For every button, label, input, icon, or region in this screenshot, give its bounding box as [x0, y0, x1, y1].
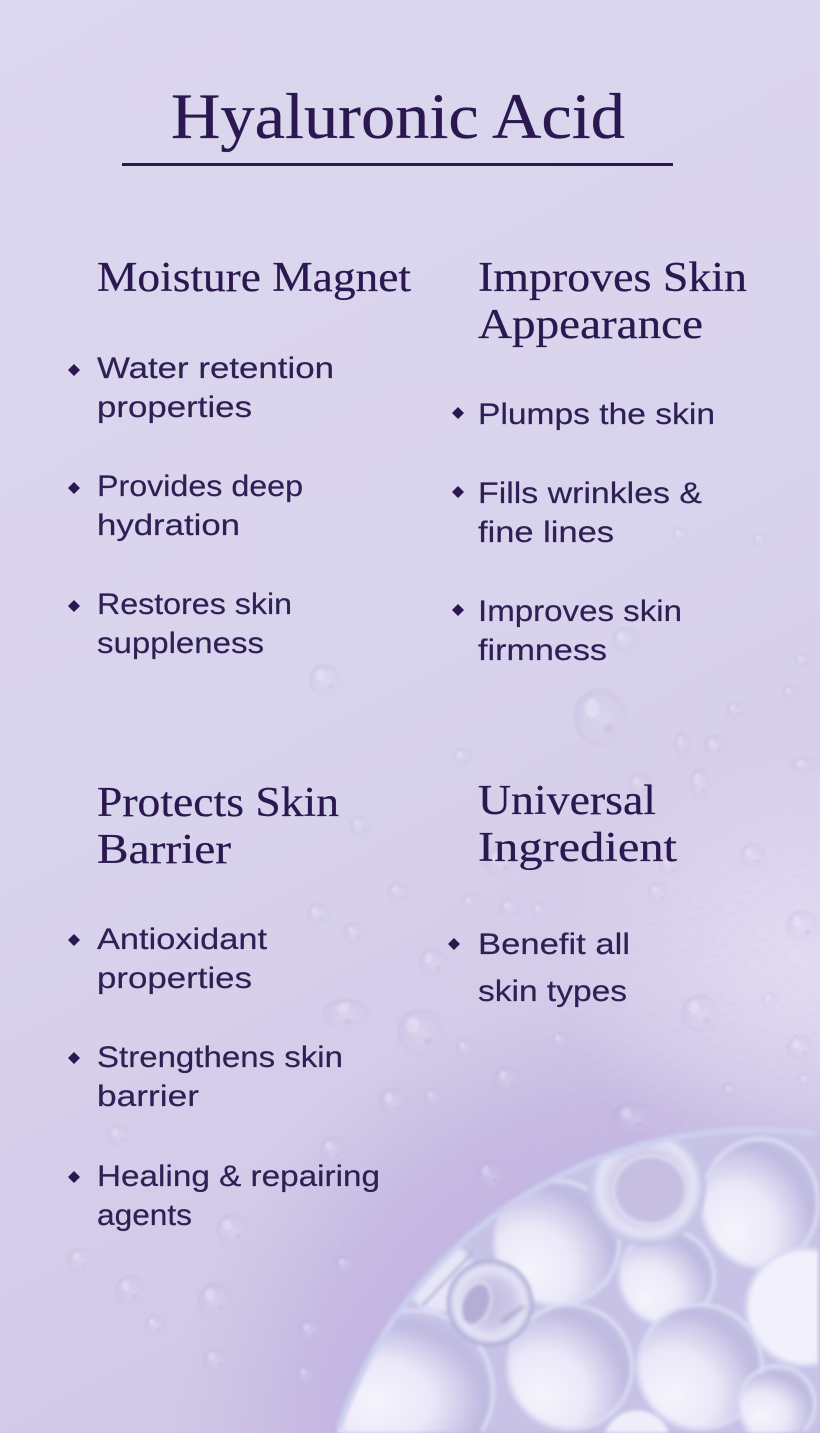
background: lavender water droplet photo [0, 526, 820, 1433]
panel: Improves Skin Appearance [452, 255, 747, 667]
bullet list: moisture benefits [68, 352, 334, 660]
bullet list: barrier benefits: Antioxidant [97, 923, 268, 956]
heading: Improves Skin Appearance: Appearance [478, 302, 703, 348]
heading: Protects Skin Barrier [97, 780, 339, 873]
bullet list: barrier benefits: Strengthens skin [97, 1041, 343, 1074]
bullet list: universal benefits: skin types [478, 975, 627, 1008]
bullet list: moisture benefits: Provides deep [97, 470, 303, 503]
bullet list: appearance benefits: firmness [478, 634, 607, 667]
bullet list: appearance benefits: fine lines [478, 516, 614, 549]
bullet list: moisture benefits: Water retention [97, 352, 334, 385]
heading: Protects Skin Barrier: Barrier [97, 827, 231, 873]
panel: Protects Skin Barrier [68, 780, 380, 1232]
heading: Universal Ingredient: Universal [478, 778, 656, 824]
panel: Moisture Magnet [68, 255, 411, 660]
title: Hyaluronic Acid [171, 81, 625, 153]
bullet list: universal benefits: Benefit all [478, 928, 630, 961]
heading: Moisture Magnet: Moisture Magnet [97, 255, 411, 301]
bullet list: barrier benefits: barrier [97, 1080, 199, 1113]
bullet list: universal benefits [448, 928, 630, 1008]
title [122, 81, 673, 166]
bullet list: moisture benefits: properties [97, 391, 252, 424]
heading: Universal Ingredient: Ingredient [478, 825, 677, 871]
bullet list: barrier benefits: properties [97, 962, 252, 995]
bullet list: barrier benefits: Healing & repairing [97, 1160, 380, 1193]
panel: Universal Ingredient [448, 778, 677, 1008]
bullet list: appearance benefits: Fills wrinkles & [478, 477, 702, 510]
bullet list: barrier benefits [68, 923, 380, 1232]
bullet list: moisture benefits: hydration [97, 509, 240, 542]
heading: Improves Skin Appearance [478, 255, 747, 348]
bullet list: appearance benefits: Plumps the skin [478, 398, 715, 431]
bullet list: moisture benefits: Restores skin [97, 588, 292, 621]
image: hyaluronic gel sphere with bubbles [330, 1129, 820, 1433]
heading: Universal Ingredient [478, 778, 677, 871]
bullet list: appearance benefits [452, 398, 715, 667]
heading: Improves Skin Appearance: Improves Skin [478, 255, 747, 301]
bullet list: moisture benefits: suppleness [97, 627, 264, 660]
bullet list: barrier benefits: agents [97, 1199, 192, 1232]
heading: Protects Skin Barrier: Protects Skin [97, 780, 339, 826]
bullet list: appearance benefits: Improves skin [478, 595, 682, 628]
